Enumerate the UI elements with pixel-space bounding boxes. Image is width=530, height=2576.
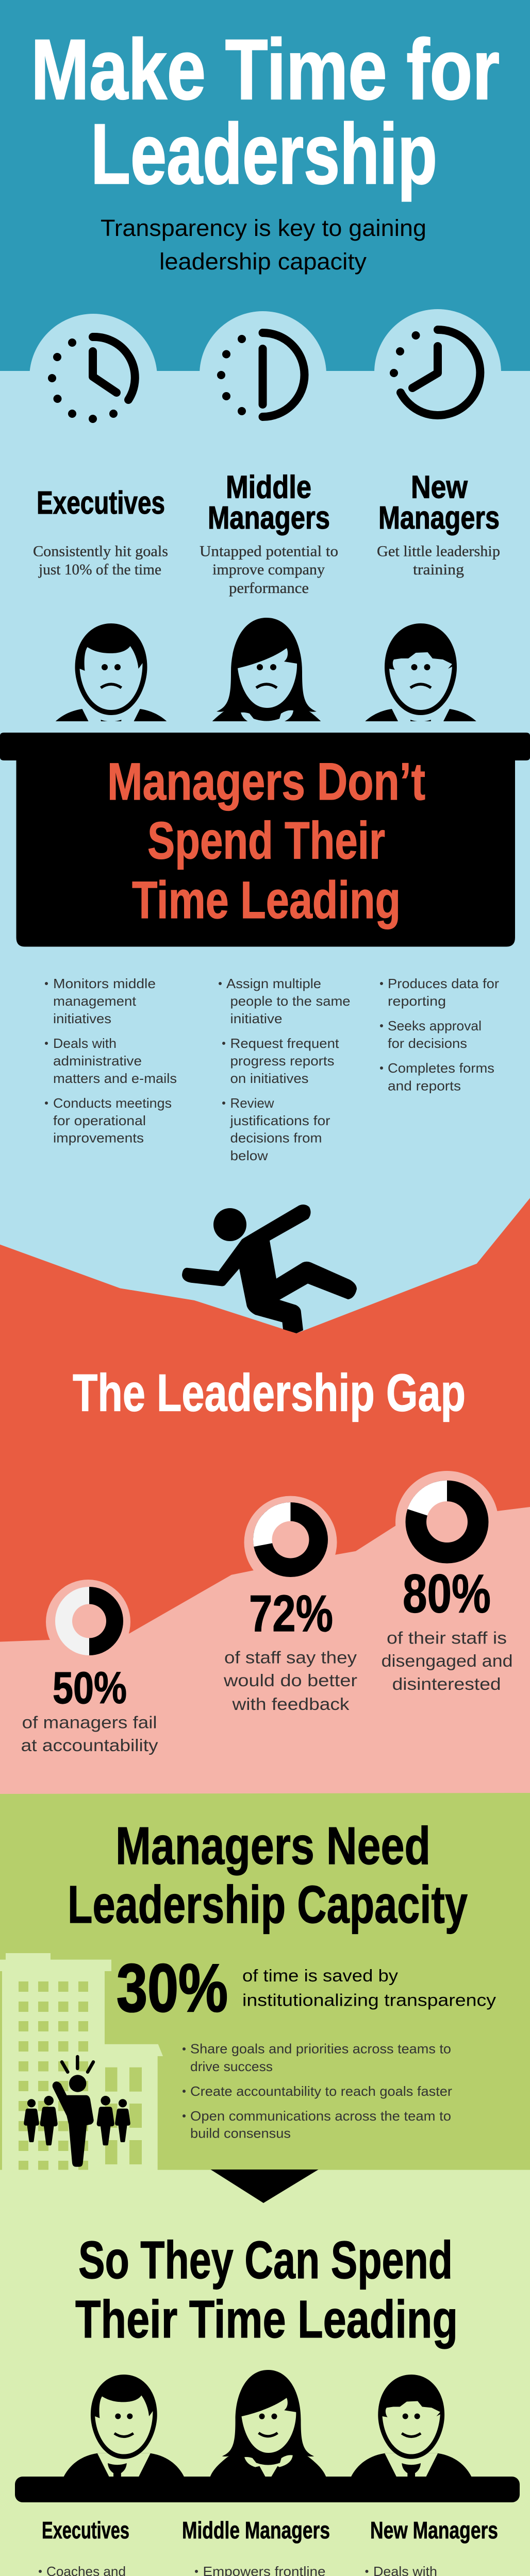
stat: 80% text (382, 1563, 513, 1693)
bullet list: middle managers: Review (230, 1095, 274, 1111)
stat: 50% text: at accountability (21, 1736, 158, 1755)
stat: 72% text: of staff say they (224, 1648, 357, 1667)
icon: leader with team (24, 2057, 130, 2167)
stat: 80% text: of their staff is (387, 1629, 507, 1648)
heading: Time Leading (132, 871, 401, 929)
bullet list: executives: initiatives (53, 1011, 111, 1026)
panel: header (0, 0, 530, 739)
bullet list: middle managers: Assign multiple (226, 976, 321, 991)
bullet list: transparency benefits: Share goals and priorities across teams to (190, 2041, 451, 2057)
bullet list: middle managers: progress reports (230, 1053, 334, 1069)
column: new managers: New (411, 470, 468, 505)
stat: 80% text: disengaged and (382, 1651, 513, 1670)
bullet list: executives: Monitors middle (53, 976, 156, 991)
subtitle: Transparency is key to gaining (101, 215, 426, 241)
person: happy executive (63, 2375, 185, 2481)
column: executives: Executives (42, 2517, 129, 2544)
bullet list: transparency benefits: drive success (190, 2059, 273, 2074)
person: happy new manager (350, 2375, 472, 2481)
desk (15, 2477, 520, 2502)
heading (107, 752, 425, 929)
title (31, 22, 500, 202)
bullet list: executives (45, 976, 177, 1146)
panel: so they can spend their time leading (0, 2170, 530, 2576)
bullet list: executives: for operational (53, 1113, 146, 1128)
column: executives: just 10% of the time (38, 561, 161, 578)
icon: falling person (182, 1205, 357, 1333)
bullet list: new managers: and reports (388, 1078, 461, 1093)
illustration: office buildings (0, 1953, 163, 2170)
column: executives: Consistently hit goals (33, 543, 168, 560)
bullet list: transparency benefits: Open communications across the team to (190, 2108, 451, 2124)
subtitle: leadership capacity (159, 248, 367, 275)
column: new managers: Get little leadership (377, 543, 500, 560)
bullet list: new managers (380, 976, 499, 1093)
bullet list: middle managers: on initiatives (230, 1071, 308, 1086)
column: middle managers: performance (229, 580, 309, 597)
subtitle (101, 215, 426, 275)
column: new managers (365, 2517, 506, 2576)
stat: 50% text: of managers fail (22, 1713, 157, 1732)
stat: 72% text (223, 1585, 357, 1714)
icon: new managers clock (374, 309, 501, 436)
bullet list: new managers: for decisions (388, 1036, 467, 1051)
heading: Spend Their (147, 811, 385, 870)
heading (75, 2230, 458, 2349)
column: middle managers (182, 2517, 330, 2576)
column: middle managers: improve company (212, 561, 325, 578)
stat: 50% text: 50% (53, 1663, 127, 1713)
stat: 72% text: with feedback (231, 1694, 350, 1714)
stat: 30%: 30% (117, 1950, 228, 2026)
stat: 72% text: 72% (249, 1585, 333, 1642)
column: new managers: Managers (378, 500, 500, 536)
pink rising area (0, 1507, 530, 1795)
bullet list: new managers: reporting (388, 993, 446, 1009)
stat: 30% (117, 1950, 496, 2026)
bullet list: middle managers (219, 976, 351, 1163)
bullet list: transparency benefits: build consensus (190, 2126, 291, 2141)
arrow: down triangle (210, 2170, 319, 2203)
bullet list: new managers: Seeks approval (388, 1018, 482, 1033)
stat: 72% text: would do better (223, 1671, 357, 1690)
icon: executives clock (29, 314, 157, 442)
panel: the leadership gap (0, 1198, 530, 1795)
bullet list: transparency benefits (183, 2041, 452, 2141)
person: sad executive (44, 623, 177, 739)
stat: 50% donut (46, 1580, 130, 1664)
bullet list: executives: Conducts meetings (53, 1095, 172, 1111)
column: new managers: training (413, 561, 464, 578)
red mountain (0, 1198, 530, 1649)
column: executives (35, 2517, 160, 2576)
panel: managers need leadership capacity (0, 1793, 530, 2170)
column: middle managers: Middle Managers (182, 2517, 330, 2544)
heading (68, 1816, 468, 1934)
desk and sign (0, 733, 530, 947)
column: executives: Executives (37, 485, 165, 521)
icon: middle managers clock (200, 311, 326, 438)
heading: Managers Don’t (107, 752, 425, 811)
bullet list: middle managers: decisions from (230, 1130, 322, 1146)
bullet list: middle managers: people to the same (230, 993, 351, 1009)
person: sad new manager (354, 623, 487, 739)
column: middle managers: Managers (208, 500, 330, 536)
column: middle managers: Middle (226, 470, 311, 505)
bullet list: transparency benefits: Create accountability to reach goals faster (190, 2083, 452, 2099)
bullet list: middle managers: below (230, 1148, 268, 1163)
panel: managers don't spend their time leading (0, 721, 530, 1391)
heading: Managers Need (115, 1816, 430, 1875)
person: happy middle manager (210, 2370, 326, 2477)
stat: 30%: of time is saved by (242, 1966, 399, 1985)
bullet list: executives: administrative (53, 1053, 142, 1069)
column: new managers (377, 470, 500, 578)
stat: 80% text: 80% (403, 1563, 491, 1624)
stat: 80% text: disinterested (392, 1674, 501, 1693)
bullet list: middle managers: Request frequent (230, 1036, 339, 1051)
stat: 30%: institutionalizing transparency (242, 1991, 496, 2010)
bullet list: executives: management (53, 993, 137, 1009)
column: middle managers (200, 470, 338, 597)
bullet list: middle managers: justifications for (229, 1113, 330, 1128)
stat: 80% donut (395, 1471, 499, 1574)
column: middle managers: Untapped potential to (200, 543, 338, 560)
stat: 72% donut (244, 1496, 337, 1589)
bullet list: middle managers: initiative (230, 1011, 283, 1026)
person: sad middle manager (204, 618, 329, 734)
stat: 50% text (21, 1663, 158, 1755)
column: executives (33, 485, 168, 578)
bullet list: new managers: Produces data for (388, 976, 499, 991)
bullet list: executives: matters and e-mails (53, 1071, 177, 1086)
bullet list: executives: improvements (53, 1130, 144, 1146)
bullet list: executives: Deals with (53, 1036, 117, 1051)
bullet list: new managers: Completes forms (388, 1060, 494, 1076)
